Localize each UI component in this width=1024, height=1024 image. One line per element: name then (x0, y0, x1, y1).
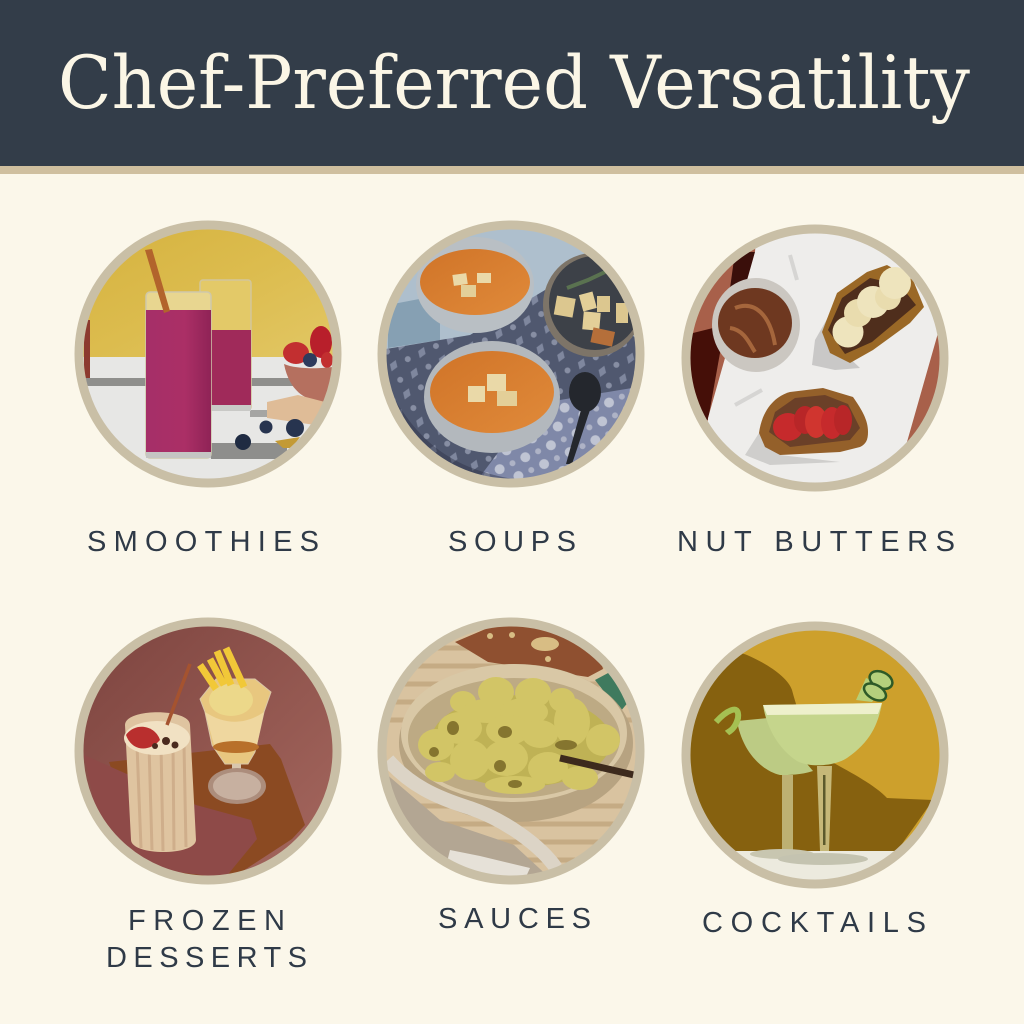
panel: smoothies (79, 225, 340, 558)
photo: frozen desserts (80, 622, 340, 882)
bowl (399, 664, 633, 822)
photo: cocktails (690, 630, 940, 880)
label: frozen desserts: DESSERTS (106, 942, 307, 974)
ring (79, 225, 337, 483)
label: frozen desserts: FROZEN (128, 905, 285, 937)
fork (560, 758, 634, 775)
ring (382, 622, 640, 880)
linen (389, 776, 542, 874)
board (109, 744, 305, 880)
spoon (569, 372, 601, 412)
panel: soups (380, 225, 650, 558)
panel: sauces (380, 622, 642, 935)
top bowl (416, 237, 534, 333)
napkin (98, 767, 257, 876)
shadows (812, 319, 860, 370)
photo: sauces (386, 626, 636, 876)
front glass (763, 703, 882, 765)
ring (382, 225, 640, 483)
straw (167, 664, 190, 725)
label: sauces: SAUCES (438, 903, 591, 935)
wooden board (455, 625, 603, 677)
banana toast (822, 265, 924, 363)
panel: nut butters (677, 228, 955, 558)
header banner (0, 0, 1024, 174)
plate (543, 253, 643, 357)
label: nut butters: NUT BUTTERS (677, 526, 955, 558)
berry bowl (283, 342, 309, 364)
coupe (200, 679, 271, 764)
panel: frozen desserts (79, 622, 340, 974)
title: Chef-Preferred Versatility (58, 41, 971, 126)
front glass (146, 292, 211, 458)
label: soups: SOUPS (448, 526, 576, 558)
strawberry toast (759, 388, 868, 455)
jar (712, 278, 800, 372)
tall glass (125, 712, 196, 852)
label: cocktails: COCKTAILS (702, 907, 926, 939)
back glass (737, 718, 813, 775)
ring (686, 229, 944, 487)
pasta (431, 695, 611, 787)
straw (145, 249, 170, 313)
photo: smoothies (80, 225, 340, 487)
ring (686, 626, 944, 884)
label: smoothies: SMOOTHIES (87, 526, 319, 558)
back glass (200, 280, 251, 410)
label: frozen desserts (106, 905, 307, 974)
blueberries (260, 420, 272, 434)
cucumber garnish right (856, 678, 874, 702)
cucumber garnish left (716, 710, 738, 733)
panel: cocktails (685, 626, 947, 939)
bottom bowl (424, 341, 560, 453)
photo: soups (386, 230, 636, 478)
ring (79, 622, 337, 880)
marble (708, 234, 938, 482)
photo: nut butters (690, 234, 940, 482)
